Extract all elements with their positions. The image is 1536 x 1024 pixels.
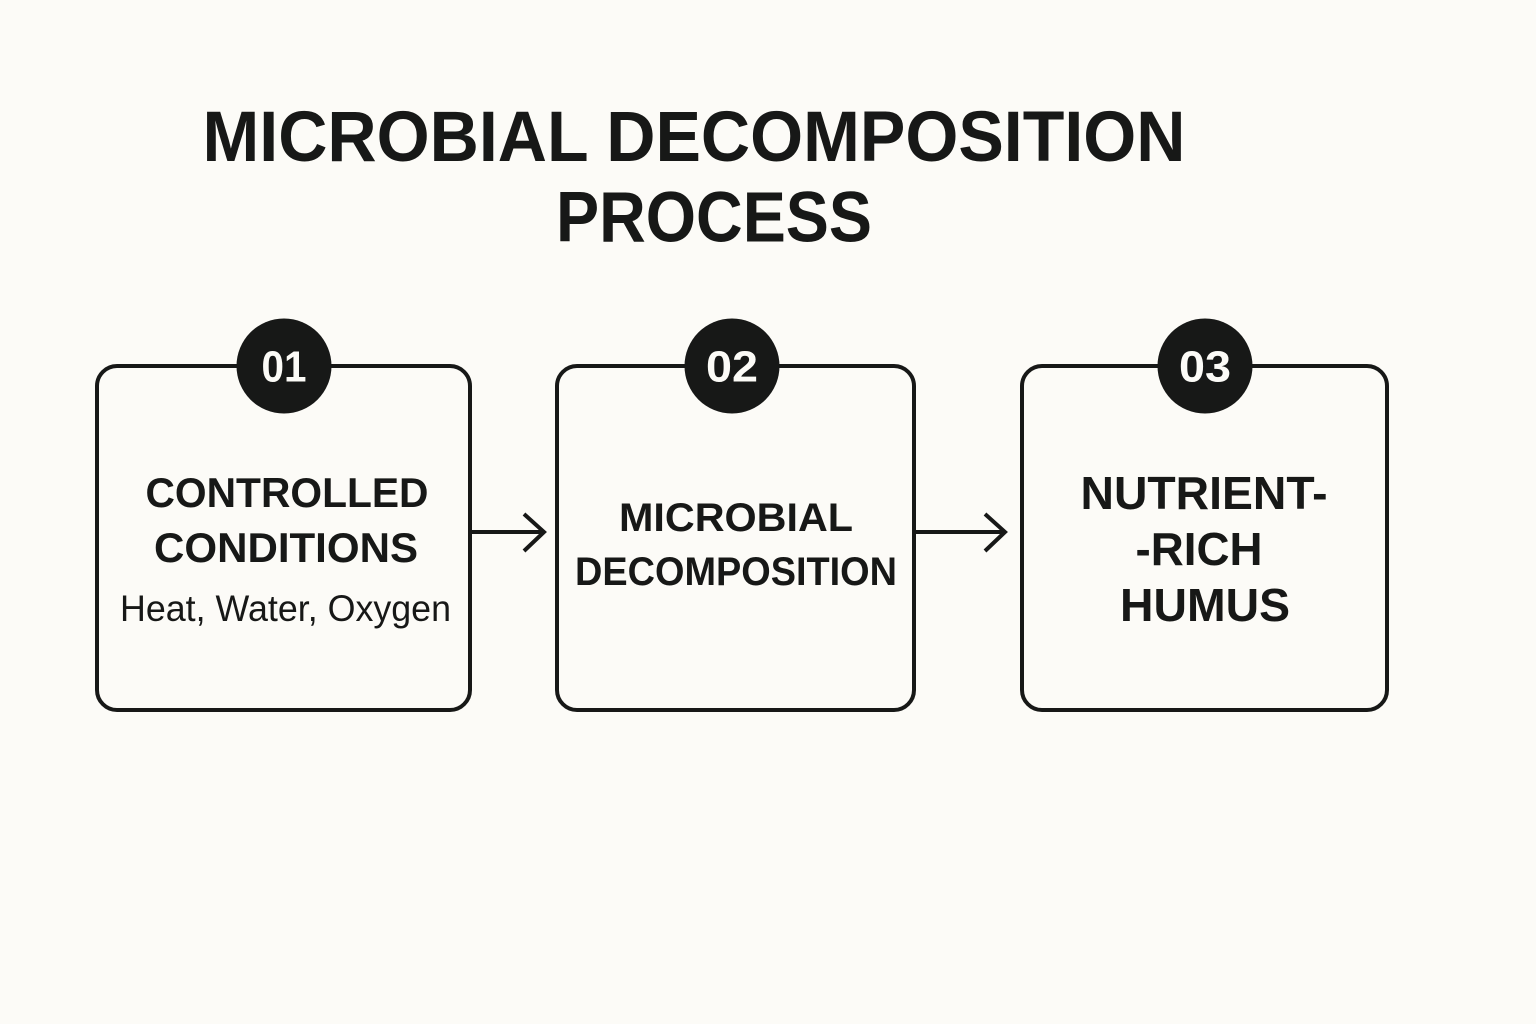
badge 02 <box>684 318 780 414</box>
heading: controlled conditions: CONTROLLED <box>146 469 428 516</box>
heading: microbial decomposition <box>575 496 897 594</box>
heading: nutrient-rich humus: NUTRIENT- <box>1080 467 1328 519</box>
arrow: step 1 to step 2 <box>472 514 544 551</box>
panel: step 3 nutrient-rich humus <box>1022 318 1387 710</box>
title: PROCESS <box>556 178 872 258</box>
title: MICROBIAL DECOMPOSITION <box>202 98 1186 177</box>
arrow: step 2 to step 3 <box>916 514 1005 551</box>
heading: nutrient-rich humus: HUMUS <box>1120 579 1290 631</box>
panel: step 1 controlled conditions <box>97 318 470 710</box>
heading: nutrient-rich humus <box>1080 467 1328 631</box>
heading: microbial decomposition: MICROBIAL <box>619 496 853 540</box>
heading: nutrient-rich humus: -RICH <box>1136 523 1262 575</box>
badge 02: 02 <box>706 342 758 392</box>
heading: microbial decomposition: DECOMPOSITION <box>575 550 897 594</box>
badge 03 <box>1158 318 1252 414</box>
badge 03: 03 <box>1179 342 1231 392</box>
heading: controlled conditions <box>146 469 428 571</box>
heading: controlled conditions: CONDITIONS <box>154 524 418 571</box>
panel: step 2 microbial decomposition <box>557 318 914 710</box>
title <box>202 98 1186 258</box>
badge 01 <box>236 318 332 414</box>
badge 01: 01 <box>262 342 306 392</box>
text: heat water oxygen: Heat, Water, Oxygen <box>120 588 451 629</box>
